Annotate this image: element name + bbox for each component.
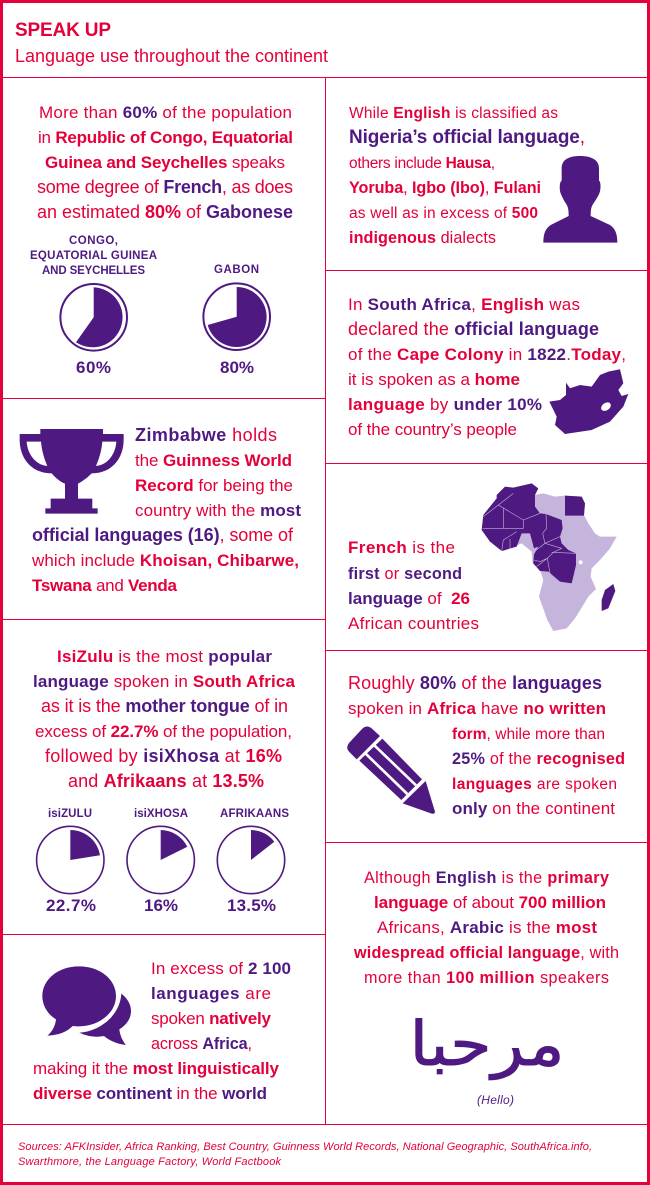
text block: 2 100 languages: across Africa,: [151, 1035, 252, 1053]
pie chart: Congo 60%: EQUATORIAL GUINEA: [30, 250, 157, 262]
text block: 2 100 languages: spoken natively: [151, 1009, 272, 1028]
pie chart: Congo 60%: [30, 235, 157, 377]
text block: Zimbabwe: country with the most: [135, 501, 301, 520]
text block: primary language: more than 100 million speakers: [364, 969, 609, 987]
panel: Zimbabwe record: [20, 425, 301, 595]
text block: isiZulu: followed by isiXhosa at 16%: [45, 746, 282, 766]
panel: South Africa English: [348, 295, 628, 439]
sources: [18, 1141, 592, 1168]
text block: Zimbabwe: the Guinness World: [135, 451, 292, 470]
pie chart: isiXhosa 16%: [127, 808, 194, 915]
text block: 2 100 languages: [33, 959, 291, 1103]
text block: primary language: language of about 700 million: [374, 893, 606, 912]
title: [15, 20, 328, 66]
sources: Swarthmore, the Language Factory, World Factbook: [18, 1156, 282, 1168]
text block: French speakers: an estimated 80% of Gabonese: [37, 202, 293, 222]
panel: French in Congo and Gabon: [30, 103, 293, 377]
text block: 2 100 languages: diverse continent in the world: [33, 1084, 267, 1103]
text block: written form: spoken in Africa have no written: [348, 699, 606, 718]
caption: Hello: (Hello): [477, 1093, 514, 1107]
text block: 2 100 languages: languages are: [151, 984, 271, 1003]
text block: Nigeria languages: Nigeria’s official language,: [349, 127, 585, 148]
text block: French countries: African countries: [348, 614, 479, 633]
pie chart: isiZulu 22.7%: [37, 808, 104, 915]
text block: Zimbabwe: Tswana and Venda: [32, 576, 178, 595]
text block: English in South Africa: it is spoken as a home: [348, 370, 520, 389]
text block: English in South Africa: of the Cape Colony in 1822.Today,: [348, 345, 626, 364]
text block: primary language: [353, 869, 619, 987]
text block: Zimbabwe: official languages (16), some of: [32, 525, 294, 545]
text block: written form: 25% of the recognised: [452, 750, 625, 768]
text block: French speakers: More than 60% of the population: [39, 103, 292, 122]
title: Language use throughout the continent: [15, 46, 328, 66]
text block: Zimbabwe: Zimbabwe holds: [135, 425, 277, 445]
text block: English in South Africa: declared the official language: [348, 319, 599, 339]
pie chart: Afrikaans 13.5%: 13.5%: [227, 896, 276, 915]
text block: French speakers: Guinea and Seychelles speaks: [45, 153, 285, 172]
pie chart: Gabon 80%: [203, 264, 270, 377]
text block: primary language: widespread official language, with: [353, 944, 619, 962]
icon: person silhouette: [543, 156, 617, 243]
text block: French countries: [348, 538, 479, 633]
panel: unwritten languages: [347, 673, 625, 818]
pie chart: isiXhosa 16%: 16%: [144, 896, 178, 915]
text block: Nigeria languages: as well as in excess of 500: [349, 205, 538, 222]
text block: English in South Africa: language by under 10%: [348, 395, 542, 414]
text block: English in South Africa: of the country’s people: [348, 420, 517, 439]
icon: trophy: [20, 429, 124, 514]
text block: English in South Africa: In South Africa, English was: [348, 295, 580, 314]
text block: written form: form, while more than: [452, 726, 605, 743]
text block: 2 100 languages: In excess of 2 100: [151, 959, 291, 978]
text block: 2 100 languages: making it the most linguistically: [33, 1059, 280, 1078]
icon: pencil: [347, 726, 435, 814]
panel: French in Africa: [348, 483, 617, 633]
text block: Nigeria languages: others include Hausa,: [349, 155, 495, 172]
text block: French speakers: [37, 103, 293, 222]
icon: speech bubbles: [42, 966, 131, 1045]
pie chart: isiZulu 22.7%: isiZULU: [48, 808, 92, 820]
pie chart: Afrikaans 13.5%: AFRIKAANS: [220, 808, 289, 820]
panel: English and Arabic: [353, 869, 619, 1107]
text block: written form: Roughly 80% of the languages: [348, 673, 602, 693]
text block: Nigeria languages: Yoruba, Igbo (Ibo), Fulani: [349, 179, 541, 197]
text block: isiZulu: [33, 647, 296, 791]
text block: isiZulu: and Afrikaans at 13.5%: [68, 771, 264, 791]
text block: Nigeria languages: While English is classified as: [349, 105, 558, 122]
text block: written form: [348, 673, 625, 818]
pie chart: Congo 60%: CONGO,: [69, 235, 118, 247]
text block: English in South Africa: [348, 295, 626, 439]
text block: primary language: Although English is the primary: [364, 869, 609, 887]
text block: French countries: language of 26: [348, 589, 470, 608]
text block: Nigeria languages: indigenous dialects: [349, 229, 496, 247]
text block: isiZulu: as it is the mother tongue of in: [41, 696, 288, 716]
panel: South African home languages: [33, 647, 296, 915]
map: Africa French-speaking countries: [482, 483, 617, 631]
text block: French countries: French is the: [348, 538, 455, 557]
icon: South Africa map: [549, 369, 628, 434]
text block: written form: only on the continent: [452, 799, 615, 818]
text block: isiZulu: excess of 22.7% of the population,: [35, 722, 292, 741]
title: SPEAK UP: [15, 20, 111, 41]
text block: isiZulu: IsiZulu is the most popular: [57, 647, 272, 666]
sources: Sources: AFKInsider, Africa Ranking, Best Country, Guinness World Records, National Geographic, SouthAfrica.info,: [18, 1141, 592, 1153]
pie chart: Gabon 80%: GABON: [214, 264, 259, 276]
pie chart: isiZulu 22.7%: 22.7%: [46, 896, 96, 915]
text block: French speakers: some degree of French, as does: [37, 177, 293, 197]
text block: French countries: first or second: [348, 565, 462, 583]
text block: Zimbabwe: [31, 425, 301, 595]
text block: written form: languages are spoken: [452, 776, 617, 793]
text block: French speakers: in Republic of Congo, Equatorial: [38, 128, 293, 147]
text block: Zimbabwe: which include Khoisan, Chibarwe,: [31, 551, 299, 570]
arabic greeting: مرحبا: [409, 1009, 565, 1080]
text block: Nigeria languages: [349, 105, 585, 247]
pie chart: Gabon 80%: 80%: [220, 358, 254, 377]
pie chart: Congo 60%: AND SEYCHELLES: [42, 265, 145, 277]
text block: isiZulu: language spoken in South Africa: [33, 672, 296, 691]
pie chart: Afrikaans 13.5%: [217, 808, 289, 915]
panel: African languages count: [33, 959, 291, 1103]
pie chart: isiXhosa 16%: isiXHOSA: [134, 808, 188, 820]
pie chart: Congo 60%: 60%: [76, 358, 111, 377]
text block: Zimbabwe: Record for being the: [135, 476, 293, 495]
text block: primary language: Africans, Arabic is the most: [377, 918, 597, 937]
panel: Nigeria: [349, 105, 617, 247]
